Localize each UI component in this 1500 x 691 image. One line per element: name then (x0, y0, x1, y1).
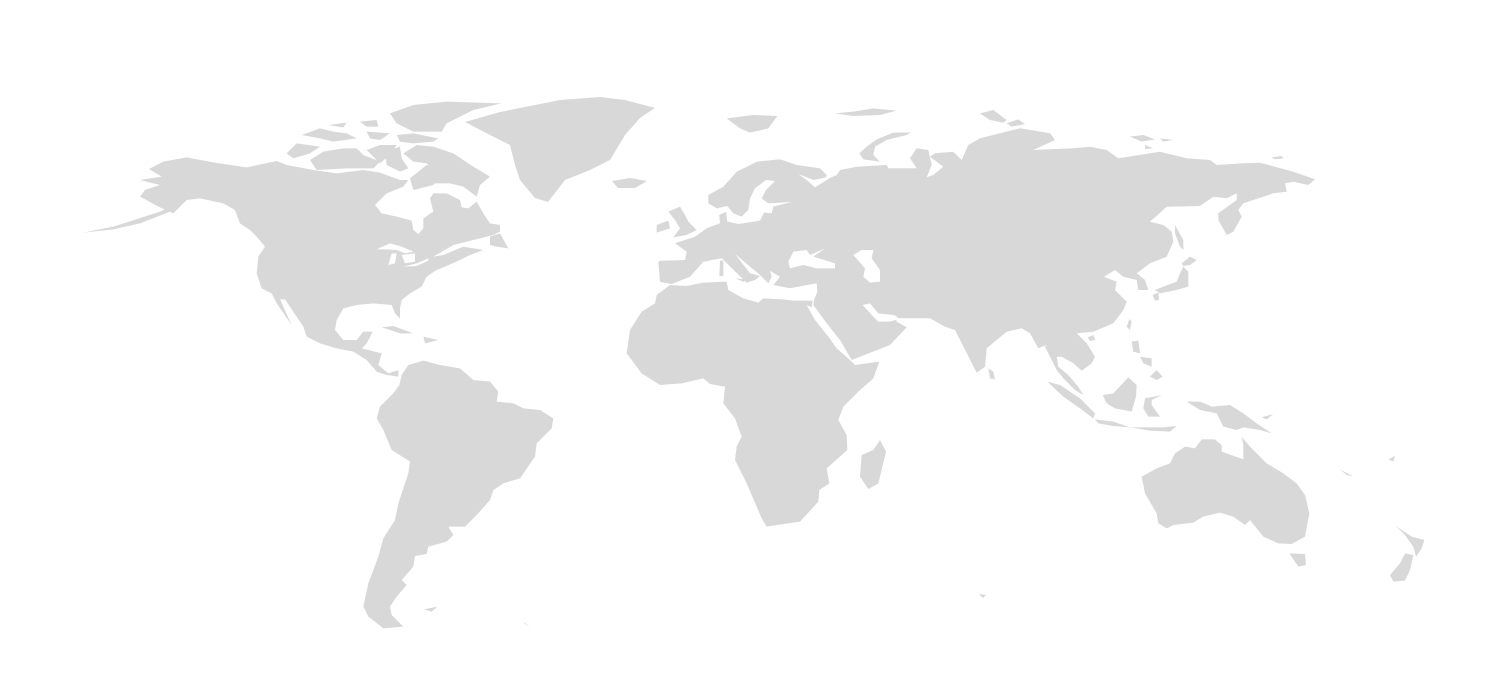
Sumatra (1047, 382, 1095, 418)
Persian Gulf (863, 303, 898, 322)
Aleutian islands (83, 200, 187, 233)
Black Sea (788, 248, 835, 268)
Southeast Asia and Oceania (1047, 377, 1424, 582)
Sri Lanka (988, 368, 995, 379)
Australia (1142, 437, 1309, 544)
New Zealand (1396, 526, 1424, 557)
Borneo (1103, 377, 1137, 412)
Franz Josef Land (835, 108, 897, 116)
Tasmania (1289, 553, 1306, 567)
North America (83, 157, 500, 377)
Taiwan (1127, 319, 1132, 330)
South America (363, 361, 553, 628)
Svalbard (727, 115, 777, 133)
European and Arctic islands (657, 108, 911, 282)
Baltic Sea (717, 180, 792, 224)
White Sea (798, 174, 837, 187)
Africa (627, 282, 886, 527)
Caspian Sea (853, 250, 880, 283)
Eurasia (658, 128, 1315, 395)
Great Britain (668, 207, 697, 237)
Sicily (735, 278, 745, 282)
Great Lakes (377, 243, 428, 267)
Ireland (657, 221, 670, 233)
East Asian islands (980, 110, 1283, 380)
Sakhalin (1175, 225, 1183, 250)
Greenland (465, 97, 655, 202)
Sardinia and Corsica (719, 261, 723, 276)
Kerguelen (979, 594, 986, 598)
Iceland (612, 178, 647, 188)
Canadian Arctic islands (287, 102, 508, 343)
Japan (1182, 257, 1197, 266)
Novaya Zemlya (859, 132, 911, 162)
Madagascar (860, 440, 886, 489)
Java (1095, 419, 1130, 427)
Hainan (1088, 335, 1095, 341)
Sulawesi (1143, 395, 1162, 417)
Philippines (1132, 341, 1140, 353)
inland seas of Europe and Asia (717, 174, 898, 322)
New Guinea (1187, 402, 1272, 433)
